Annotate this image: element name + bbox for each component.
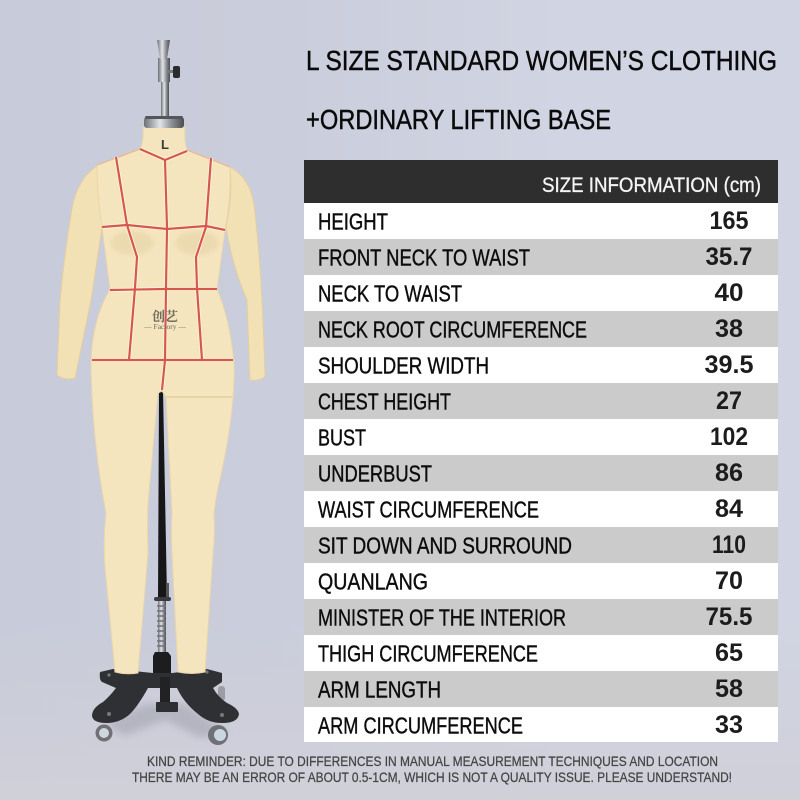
row: shoulder width (304, 347, 778, 383)
table header (304, 160, 778, 203)
row: height (304, 203, 778, 239)
row: neck to waist: 40 (714, 279, 744, 307)
row: bust: 102 (710, 423, 748, 451)
row: bust (304, 419, 778, 455)
measurement tapes (92, 149, 233, 390)
row: underbust: UNDERBUST (318, 460, 432, 486)
table header: SIZE INFORMATION (cm) (542, 174, 761, 197)
row: neck to waist (304, 275, 778, 311)
row: minister of the interior (304, 599, 778, 635)
row: quanlang: QUANLANG (318, 568, 428, 594)
row: chest height: CHEST HEIGHT (318, 388, 451, 414)
neck cap (144, 116, 184, 128)
row: waist circumference: WAIST CIRCUMFERENCE (318, 496, 539, 522)
row: neck root circumference (304, 311, 778, 347)
torso and legs (91, 127, 234, 674)
size mark: L (161, 137, 169, 152)
subtitle: +ORDINARY LIFTING BASE (306, 104, 611, 135)
arms (57, 165, 265, 380)
watermark: — Factory — (143, 322, 186, 331)
row: neck to waist: NECK TO WAIST (318, 280, 462, 306)
row: quanlang: 70 (715, 567, 743, 595)
row: sit down and surround (304, 527, 778, 563)
row: arm circumference: ARM CIRCUMFERENCE (318, 712, 523, 738)
row: minister of the interior: 75.5 (706, 603, 753, 631)
row: arm circumference (304, 707, 778, 742)
row: arm circumference: 33 (715, 711, 743, 739)
row: thigh circumference (304, 635, 778, 671)
neck post and clamp (157, 40, 180, 118)
row: front neck to waist: FRONT NECK TO WAIST (318, 244, 530, 270)
row: arm length (304, 671, 778, 707)
row: underbust: 86 (715, 459, 743, 487)
row: chest height (304, 383, 778, 419)
row: chest height: 27 (716, 387, 742, 415)
row: minister of the interior: MINISTER OF THE INTERIOR (318, 604, 566, 630)
row: arm length: 58 (715, 675, 743, 703)
row: thigh circumference: THIGH CIRCUMFERENCE (318, 640, 538, 666)
row: shoulder width: SHOULDER WIDTH (318, 352, 489, 378)
watermark: 创艺 (152, 306, 178, 325)
row: waist circumference (304, 491, 778, 527)
row: quanlang (304, 563, 778, 599)
row: shoulder width: 39.5 (704, 351, 754, 379)
floor shadow (105, 704, 228, 738)
row: front neck to waist (304, 239, 778, 275)
reminder note: KIND REMINDER: DUE TO DIFFERENCES IN MANUAL MEASUREMENT TECHNIQUES AND LOCATION (147, 753, 718, 769)
row: sit down and surround: 110 (712, 531, 746, 559)
row: neck root circumference: 38 (715, 315, 743, 343)
row: neck root circumference: NECK ROOT CIRCUMFERENCE (318, 316, 587, 342)
row: sit down and surround: SIT DOWN AND SURROUND (318, 532, 572, 558)
row: height: HEIGHT (318, 208, 388, 234)
row: front neck to waist: 35.7 (706, 243, 752, 271)
mannequin (57, 40, 265, 745)
row: underbust (304, 455, 778, 491)
size table (304, 160, 778, 742)
row: thigh circumference: 65 (715, 639, 743, 667)
row: arm length: ARM LENGTH (318, 676, 441, 702)
row: waist circumference: 84 (715, 495, 743, 523)
reminder note (132, 753, 732, 785)
watermark (143, 306, 186, 331)
lifting stand (153, 390, 171, 677)
base with wheels (92, 669, 239, 745)
row: bust: BUST (318, 424, 366, 450)
row: height: 165 (710, 207, 749, 235)
